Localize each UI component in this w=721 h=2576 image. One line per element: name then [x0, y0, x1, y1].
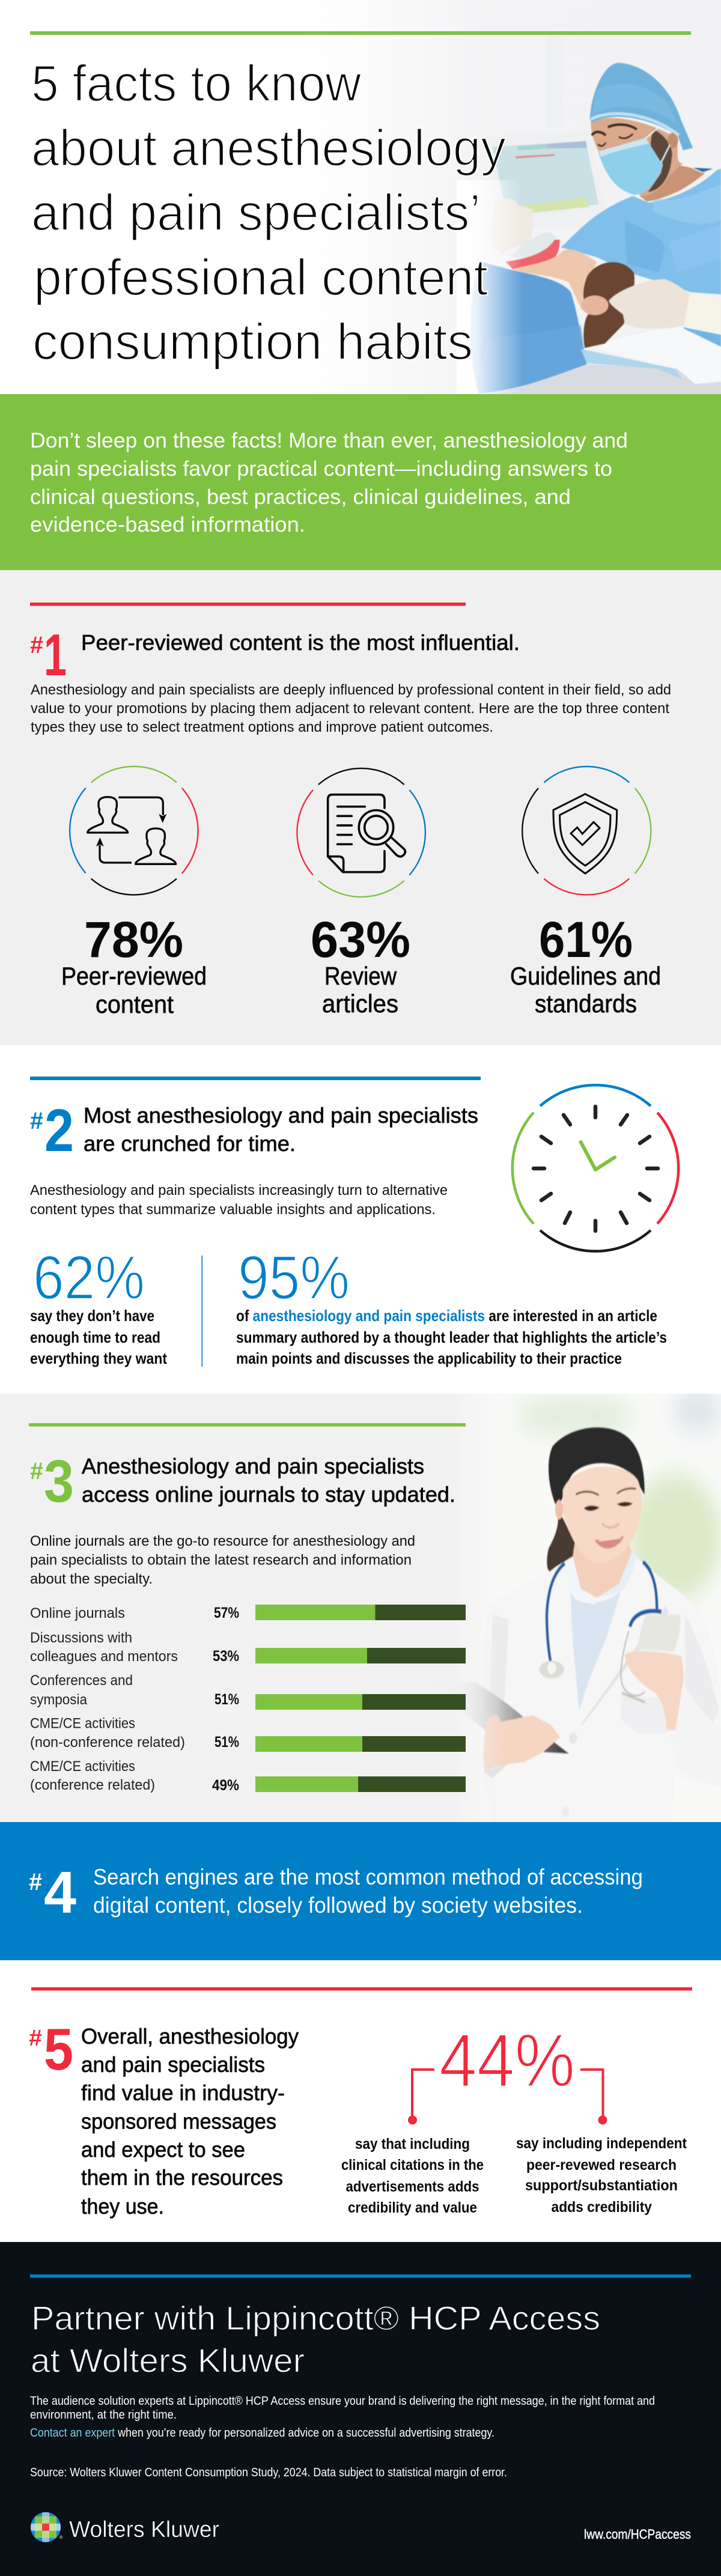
- bar row: CME non-conference: CME/CE activities: [30, 1716, 135, 1731]
- fact 1 body: value to your promotions by placing them adjacent to relevant content. Here are the top three content: [31, 700, 669, 717]
- fact number 5: 5: [44, 2016, 73, 2082]
- fact number 3: 3: [44, 1448, 74, 1515]
- panel: footer: [0, 2242, 721, 2576]
- mask: [598, 138, 663, 195]
- callout: clinical citations: advertisements adds: [346, 2178, 479, 2195]
- coat: [544, 1557, 693, 1754]
- footer body: environment, at the right time.: [30, 2408, 177, 2422]
- fact 2 body: [30, 1182, 448, 1218]
- bar row: CME non-conference: (non-conference related): [30, 1734, 185, 1751]
- title: professional content: [34, 249, 488, 306]
- fact 1 heading: Peer-reviewed content is the most influential.: [81, 630, 520, 655]
- bar row: discussions: colleagues and mentors: [30, 1648, 178, 1665]
- footer body: Contact an expert when you’re ready for personalized advice on a successful advertising strategy.: [30, 2426, 494, 2440]
- logo: Wolters Kluwer: Wolters Kluwer: [69, 2517, 219, 2542]
- title: [31, 55, 506, 371]
- callout: independent research: [516, 2135, 687, 2216]
- fact 5 text: and pain specialists: [81, 2052, 265, 2077]
- fact 3 body: [30, 1533, 415, 1587]
- fact number 5: [29, 2016, 73, 2082]
- tablet: [437, 1682, 569, 1754]
- icon: review article magnifier: [297, 768, 425, 897]
- fact 2 heading: Most anesthesiology and pain specialists: [84, 1103, 478, 1128]
- stethoscope: [547, 1563, 565, 1663]
- fact 4 text: digital content, closely followed by society websites.: [93, 1893, 583, 1918]
- bar row: CME conference: (conference related): [30, 1777, 155, 1793]
- icon: peer-reviewed people exchange: [70, 767, 198, 895]
- callout: clinical citations: [341, 2136, 484, 2216]
- bar row: discussions: Discussions with: [30, 1630, 132, 1646]
- fact 1 body: Anesthesiology and pain specialists are deeply influenced by professional content in their field, so add: [31, 682, 671, 698]
- shirt: [570, 1591, 621, 1711]
- fact number 1: 1: [44, 622, 67, 688]
- fact number 1: #: [30, 632, 43, 658]
- stat: 63% review articles: [311, 911, 410, 1018]
- neck: [571, 1537, 634, 1598]
- fact number 4: #: [29, 1869, 42, 1895]
- fact 5 text: [81, 2024, 299, 2219]
- stat: 78% peer-reviewed content: [61, 911, 207, 1018]
- callout: independent research: adds credibility: [552, 2199, 652, 2216]
- left hand: [483, 1715, 560, 1772]
- fact 3 heading: access online journals to stay updated.: [82, 1482, 455, 1507]
- source note: Source: Wolters Kluwer Content Consumption Study, 2024. Data subject to statistical margin of error.: [30, 2465, 507, 2479]
- fact 5 text: Overall, anesthesiology: [81, 2024, 299, 2049]
- intro text: Don’t sleep on these facts! More than ever, anesthesiology and: [30, 429, 628, 452]
- stat: 78% peer-reviewed content: Peer-reviewed: [61, 962, 207, 990]
- callout: independent research: peer-revewed research: [526, 2157, 677, 2174]
- photo: doctor with phone and tablet: [474, 1394, 721, 1822]
- bar row: CME non-conference: 51%: [214, 1734, 239, 1751]
- bar row: discussions: [30, 1630, 466, 1665]
- fact number 2: 2: [44, 1097, 74, 1164]
- bar row: CME conference: CME/CE activities: [30, 1758, 135, 1775]
- photo fade: [445, 1394, 505, 1822]
- callout: independent research: say including independent: [516, 2135, 687, 2152]
- fact 2 body: Anesthesiology and pain specialists increasingly turn to alternative: [30, 1182, 448, 1198]
- fact number 2: [30, 1097, 74, 1164]
- fact number 5: #: [29, 2026, 42, 2051]
- top rule: [30, 31, 691, 35]
- stat: 63% review articles: 63%: [311, 911, 410, 968]
- photo: anesthesiologist with patient: [470, 34, 721, 395]
- stat: 61% guidelines and standards: standards: [535, 989, 637, 1018]
- stat: 95% interested in summaries: summary authored by a thought leader that highlights the article’s: [236, 1328, 667, 1346]
- fact 2 body: content types that summarize valuable insights and applications.: [30, 1201, 436, 1218]
- fact 2 heading: are crunched for time.: [84, 1131, 296, 1156]
- bar row: CME conference: 49%: [212, 1777, 239, 1794]
- fact 3 heading: Anesthesiology and pain specialists: [82, 1454, 424, 1478]
- fact number 1: [30, 622, 67, 688]
- callout: clinical citations: clinical citations in the: [341, 2157, 484, 2174]
- stat: 95% interested in summaries: 95%: [238, 1243, 350, 1312]
- fact 3 heading: [82, 1454, 455, 1507]
- stat: 44% with bracket: 44%: [439, 2019, 575, 2103]
- bar row: online journals: Online journals: [30, 1605, 125, 1621]
- fact 5 text: they use.: [81, 2194, 164, 2219]
- fact 1 body: [31, 682, 671, 735]
- intro text: pain specialists favor practical content—including answers to: [30, 457, 612, 481]
- fact number 3: [30, 1448, 74, 1515]
- title: consumption habits: [32, 314, 473, 371]
- cap: [590, 63, 693, 150]
- callout: clinical citations: credibility and value: [348, 2199, 477, 2216]
- panel: fact 1: [0, 570, 721, 1045]
- face: [591, 118, 683, 196]
- stat: 63% review articles: articles: [322, 989, 398, 1018]
- bar row: discussions: 53%: [213, 1648, 239, 1665]
- photo fade: [457, 180, 523, 394]
- gown: [561, 169, 721, 294]
- stat: 63% review articles: Review: [324, 962, 397, 990]
- bar row: conferences: Conferences and: [30, 1672, 133, 1689]
- fact 5 text: them in the resources: [81, 2165, 283, 2190]
- stat: 78% peer-reviewed content: 78%: [84, 911, 183, 968]
- icon: clock: [513, 1085, 678, 1251]
- stat: 95% interested in summaries: [236, 1243, 667, 1367]
- fact 3 body: Online journals are the go-to resource for anesthesiology and: [30, 1533, 415, 1549]
- fact 5 text: find value in industry-: [81, 2080, 285, 2105]
- callout: clinical citations: say that including: [355, 2136, 470, 2152]
- phone: [637, 1614, 681, 1651]
- intro text: [30, 429, 628, 536]
- stat: 78% peer-reviewed content: content: [96, 990, 174, 1018]
- footer heading: [31, 2299, 600, 2379]
- title: and pain specialists’: [31, 184, 481, 242]
- bar row: conferences: symposia: [30, 1692, 88, 1708]
- stat: 61% guidelines and standards: [510, 911, 661, 1018]
- intro text: evidence-based information.: [30, 513, 305, 536]
- title: about anesthesiology: [31, 120, 506, 177]
- panel: fact 3: [0, 1388, 721, 1824]
- fact 2 heading: [84, 1103, 478, 1156]
- logo: Wolters Kluwer: [30, 2511, 219, 2542]
- fact 3 body: pain specialists to obtain the latest research and information: [30, 1552, 412, 1568]
- stat: 61% guidelines and standards: 61%: [539, 911, 633, 968]
- fact number 4: 4: [44, 1859, 76, 1925]
- stat: 44% with bracket: [408, 2019, 607, 2124]
- panel: fact 2: [0, 1045, 721, 1394]
- bar row: conferences: 51%: [214, 1691, 239, 1708]
- footer heading: Partner with Lippincott® HCP Access: [31, 2299, 600, 2337]
- hair: [547, 1510, 575, 1572]
- panel: header: [0, 0, 721, 395]
- stat: 95% interested in summaries: main points and discusses the applicability to their practice: [236, 1349, 622, 1367]
- stat: 95% interested in summaries: of anesthesiology and pain specialists are interested in an article: [236, 1307, 657, 1325]
- logo: Wolters Kluwer: ®: [59, 2535, 63, 2540]
- footer heading: at Wolters Kluwer: [31, 2342, 305, 2379]
- patient gown: [470, 261, 588, 393]
- face: [563, 1466, 642, 1563]
- fact number 4: [29, 1859, 76, 1925]
- right glove: [609, 279, 691, 329]
- bar row: online journals: 57%: [214, 1605, 239, 1621]
- bar row: CME non-conference: [30, 1716, 466, 1752]
- bar row: conferences: [30, 1672, 466, 1710]
- stat: 62% no time: say they don’t have: [30, 1307, 154, 1325]
- stat: 62% no time: everything they want: [30, 1349, 167, 1367]
- fact 4 text: [93, 1865, 643, 1918]
- patient head: [513, 249, 597, 312]
- panel: intro: [0, 394, 721, 570]
- fact 5 text: sponsored messages: [81, 2109, 276, 2134]
- panel: fact 5: [0, 1960, 721, 2242]
- fact number 2: #: [30, 1108, 43, 1134]
- stat: 62% no time: 62%: [33, 1243, 145, 1312]
- bar row: online journals: [30, 1605, 466, 1621]
- fact number 3: #: [30, 1458, 43, 1484]
- bar row: CME conference: [30, 1758, 466, 1794]
- icon: guidelines shield: [522, 767, 651, 895]
- website url: lww.com/HCPaccess: [584, 2527, 691, 2542]
- stat: 62% no time: enough time to read: [30, 1328, 160, 1346]
- right hand: [625, 1651, 684, 1730]
- fact 5 text: and expect to see: [81, 2137, 245, 2161]
- bedding: [597, 327, 721, 384]
- fact 4 text: Search engines are the most common method of accessing: [93, 1865, 643, 1889]
- fact 3 body: about the specialty.: [30, 1571, 153, 1587]
- bar chart: resources used: [30, 1605, 466, 1794]
- title: 5 facts to know: [31, 55, 362, 112]
- neck: [640, 163, 705, 201]
- left glove and mask: [491, 198, 533, 255]
- intro text: clinical questions, best practices, clinical guidelines, and: [30, 485, 571, 509]
- stat: 61% guidelines and standards: Guidelines and: [510, 962, 661, 990]
- panel: fact 4: [0, 1822, 721, 1960]
- stat: 62% no time: [30, 1243, 167, 1367]
- fact 1 body: types they use to select treatment options and improve patient outcomes.: [31, 719, 493, 735]
- footer body: [30, 2394, 655, 2440]
- callout: independent research: support/substantiation: [525, 2177, 678, 2194]
